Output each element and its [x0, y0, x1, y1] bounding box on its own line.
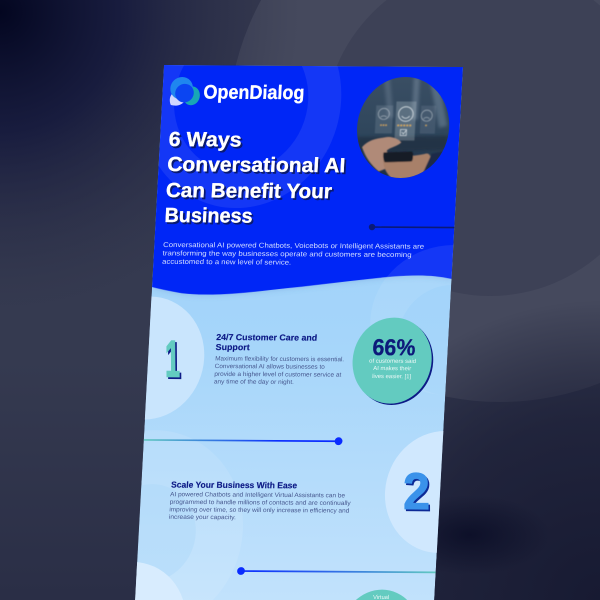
- title: 6 Ways: [170, 130, 244, 153]
- intro paragraph: accustomed to a new level of service.: [162, 259, 291, 267]
- section 1: heading: Support: [215, 342, 250, 352]
- panel: blue header with wave: [152, 65, 463, 296]
- hands and phone: [362, 136, 442, 178]
- panel: second section background circles: [136, 432, 144, 580]
- panel: tilted infographic page: [135, 65, 463, 600]
- section 1: stat circle 66%: 66%: [372, 334, 416, 360]
- rating stars: [380, 124, 427, 126]
- title: [165, 132, 346, 225]
- section 3: number circle: [135, 562, 183, 600]
- section 2: body text: [169, 491, 352, 522]
- rating panels: [374, 101, 437, 141]
- section 1: number circle: 1: [165, 331, 180, 389]
- section 1: body text: [214, 355, 345, 386]
- smiley faces: [377, 107, 433, 136]
- section 1: stat circle 66%: of customers said: [369, 359, 416, 365]
- icon: speech bubble logo: [169, 77, 201, 106]
- title: Conversational AI: [167, 153, 346, 177]
- section 1: stat circle 66%: lives easier. [1]: [372, 374, 412, 380]
- section 2: body text: programmed to handle millions of contacts and are continually: [170, 499, 352, 507]
- title: Can Benefit Your: [167, 181, 334, 205]
- section 1: body text: Maximum flexibility for customers is essential.: [215, 355, 345, 363]
- intro paragraph: Conversational AI powered Chatbots, Voicebots or Intelligent Assistants are: [163, 242, 424, 251]
- title: 6 Ways: [168, 128, 242, 152]
- section 2: heading: Scale Your Business With Ease: [171, 480, 298, 490]
- title: Business: [164, 204, 253, 228]
- section 2: body text: AI powered Chatbots and Intelligent Virtual Assistants can be: [170, 491, 346, 499]
- section 1: stat circle 66%: [350, 317, 436, 405]
- section 3: stat circle: [356, 590, 407, 600]
- lower right rings: [387, 245, 454, 280]
- intro paragraph: transforming the way businesses operate and customers are becoming: [162, 250, 412, 259]
- divider 1 with dot: [144, 436, 343, 445]
- title: Can Benefit Your: [165, 179, 333, 203]
- section 1: body text: any time of the day or night.: [214, 378, 294, 386]
- section 1: heading: 24/7 Customer Care and: [216, 332, 318, 343]
- section 2: body text: increase your capacity.: [169, 514, 236, 521]
- section 1: number circle: [144, 296, 204, 420]
- section 2: body text: improving over time, so they will only increase in efficiency and: [169, 506, 350, 515]
- logo: OpenDialog: [169, 77, 305, 107]
- title: Conversational AI: [168, 155, 348, 179]
- wordmark: OpenDialog: [203, 81, 305, 104]
- section 2: number circle: 2: [403, 463, 430, 521]
- section 1: stat circle 66%: AI makes their: [373, 366, 411, 372]
- section 1: number circle: 1: [166, 332, 182, 390]
- section 1: heading: [216, 334, 317, 352]
- section 2: number circle: [385, 431, 444, 553]
- title: Business: [166, 206, 255, 229]
- photo: hands holding phone with rating smileys: [357, 77, 450, 178]
- section 2: number circle: 2: [404, 465, 432, 523]
- header rings: [158, 65, 342, 208]
- divider 2 with dot: [237, 567, 436, 575]
- section 1: body text: Conversational AI allows businesses to: [215, 363, 325, 371]
- intro paragraph: [162, 242, 424, 265]
- accent line with dot in header: [369, 224, 455, 231]
- section 1: body text: provide a higher level of customer service at: [214, 371, 342, 379]
